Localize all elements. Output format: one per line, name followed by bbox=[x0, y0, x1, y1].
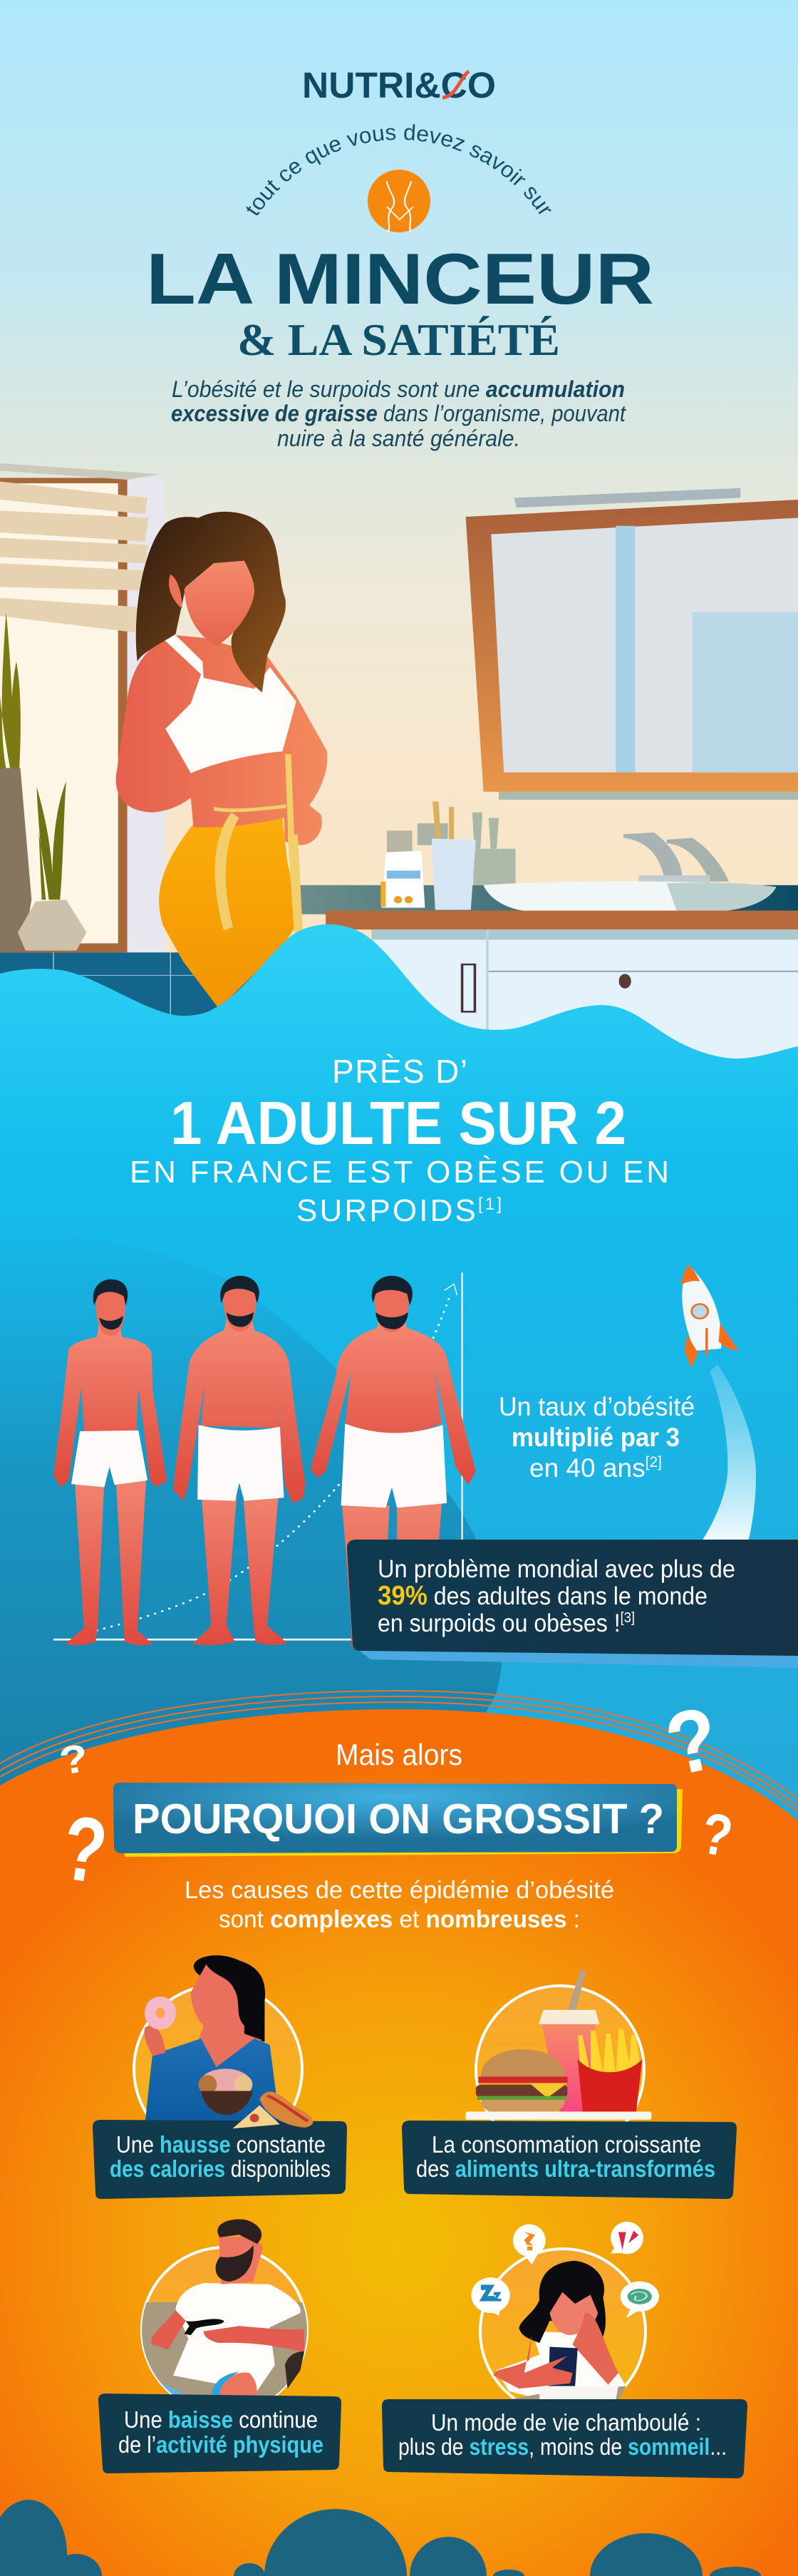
mirror bbox=[466, 488, 798, 800]
stat: obesity rate tripled: [2] bbox=[646, 1454, 662, 1470]
causes introduction bbox=[185, 1877, 614, 1933]
window with blinds bbox=[0, 463, 165, 954]
chart axes bbox=[53, 1272, 462, 1639]
man 2 bbox=[173, 1276, 306, 1645]
illustration: man with game controller bbox=[140, 2220, 309, 2396]
intro paragraph: excessive de graisse dans l’organisme, pouvant bbox=[171, 401, 626, 426]
panel: physical activity: Une baisse continue bbox=[124, 2406, 318, 2433]
stat headline: [1] bbox=[478, 1195, 502, 1214]
man 1 bbox=[53, 1279, 167, 1645]
men chart bbox=[53, 1272, 476, 1647]
curved tagline: tout ce que vous devez savoir sur bbox=[246, 124, 551, 215]
panel: lifestyle: plus de stress, moins de sommeil... bbox=[398, 2433, 727, 2460]
pizza and hot dog bbox=[232, 2091, 313, 2128]
panel: calories: des calories disponibles bbox=[110, 2155, 331, 2182]
pants bbox=[159, 818, 300, 1009]
sky and wall background bbox=[0, 0, 798, 1069]
rocket with trail bbox=[681, 1264, 756, 1542]
callout: world problem: [3] bbox=[621, 1610, 635, 1626]
question marks bbox=[56, 1689, 737, 1903]
vase and plants bbox=[0, 612, 86, 952]
illustration: fast food bbox=[466, 1970, 651, 2154]
stat: obesity rate tripled: multiplié par 3 bbox=[512, 1423, 680, 1452]
question marks: ? bbox=[696, 1800, 737, 1870]
woman measuring waist bbox=[116, 512, 327, 1009]
white crop top bbox=[163, 635, 296, 773]
panel: lifestyle bbox=[382, 2222, 747, 2478]
backsplash bbox=[282, 885, 798, 915]
panel: lifestyle: Un mode de vie chamboulé : bbox=[431, 2409, 701, 2436]
lead text: mais alors: Mais alors bbox=[336, 1738, 462, 1771]
faucet and sink bbox=[484, 833, 776, 912]
stat headline: EN FRANCE EST OBÈSE OU EN bbox=[130, 1155, 669, 1190]
banner: why do we gain weight: POURQUOI ON GROSSIT ? bbox=[133, 1796, 664, 1843]
toothbrushes and cups bbox=[418, 801, 516, 910]
stat: obesity rate tripled: en 40 ans bbox=[529, 1453, 646, 1483]
counter and cabinet bbox=[326, 911, 798, 1082]
panel: ultra-processed food bbox=[402, 1970, 737, 2199]
stat headline: SURPOIDS bbox=[296, 1193, 476, 1228]
title: LA MINCEUR bbox=[146, 239, 654, 319]
panel: calories: Une hausse constante bbox=[116, 2131, 326, 2158]
stat headline: 1 ADULTE SUR 2 bbox=[170, 1090, 626, 1158]
panel: physical activity: de l’activité physique bbox=[118, 2431, 323, 2458]
callout: world problem: en surpoids ou obèses ! bbox=[378, 1609, 643, 1637]
floor tiles bbox=[0, 952, 282, 1034]
stat: obesity rate tripled bbox=[499, 1392, 695, 1483]
panel: ultra-processed food: La consommation croissante bbox=[432, 2131, 701, 2158]
intro paragraph: nuire à la santé générale. bbox=[277, 426, 520, 451]
icon: waist in orange circle bbox=[368, 170, 430, 232]
logo: NUTRI&CO bbox=[302, 65, 496, 105]
stat: obesity rate tripled: Un taux d’obésité bbox=[499, 1392, 695, 1421]
dark blue blob bbox=[0, 1235, 503, 1803]
bottom clouds bbox=[0, 2500, 761, 2576]
panel: physical activity bbox=[98, 2220, 341, 2473]
question marks: ? bbox=[56, 1735, 92, 1783]
man 3 bbox=[311, 1276, 476, 1647]
stat headline: PRÈS D’ bbox=[332, 1053, 467, 1090]
intro paragraph: L’obésité et le surpoids sont une accumulation bbox=[172, 376, 625, 402]
measuring tape bbox=[214, 754, 303, 932]
banner: why do we gain weight bbox=[113, 1783, 683, 1857]
causes introduction: sont complexes et nombreuses : bbox=[219, 1906, 580, 1933]
orange section background bbox=[0, 1709, 798, 2576]
stat headline bbox=[130, 1053, 669, 1228]
torso and arms bbox=[116, 635, 327, 845]
question marks: ? bbox=[658, 1689, 727, 1795]
question marks: ? bbox=[56, 1796, 113, 1903]
arc stripes bbox=[0, 1691, 798, 1812]
causes introduction: Les causes de cette épidémie d’obésité bbox=[185, 1877, 614, 1904]
subtitle: & LA SATIÉTÉ bbox=[237, 314, 560, 365]
callout: world problem bbox=[347, 1540, 798, 1668]
bathroom scene bbox=[0, 463, 798, 1082]
callout: world problem: 39% des adultes dans le monde bbox=[378, 1581, 708, 1611]
face bbox=[185, 561, 254, 646]
illustration: woman with donuts bbox=[134, 1955, 302, 2153]
panel: calories bbox=[93, 1955, 347, 2199]
supplement bottle bbox=[380, 830, 425, 907]
ponytail behind bbox=[155, 743, 182, 768]
hair bbox=[136, 512, 286, 692]
panel: ultra-processed food: des aliments ultra-transformés bbox=[416, 2155, 715, 2182]
callout: world problem: Un problème mondial avec plus de bbox=[378, 1555, 735, 1583]
illustration: tired woman with phone and bubbles bbox=[471, 2222, 659, 2414]
intro paragraph bbox=[171, 376, 626, 451]
blue section background wave bbox=[0, 924, 798, 1925]
